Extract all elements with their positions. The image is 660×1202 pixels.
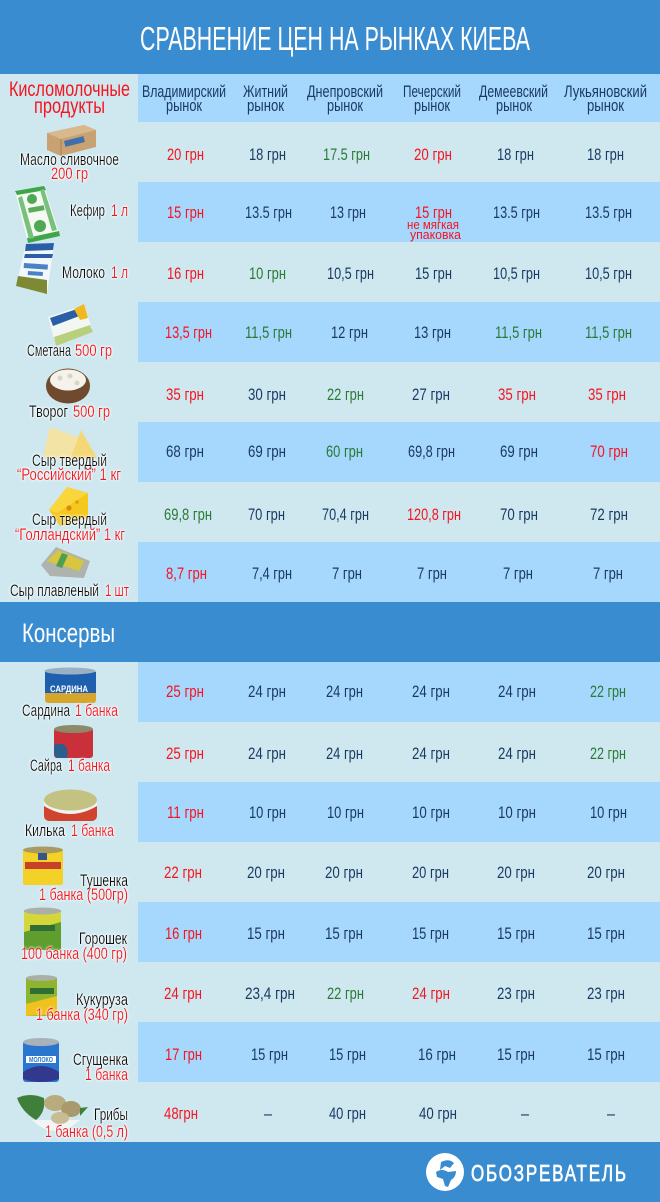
prices: 11,5 грн bbox=[495, 323, 542, 342]
prices: 20 грн bbox=[325, 863, 363, 882]
prices: 15 грн bbox=[251, 1045, 288, 1064]
prices: 18 грн bbox=[249, 145, 286, 164]
prices: 15 грн bbox=[415, 264, 452, 283]
prices: 15 грн bbox=[587, 924, 625, 943]
section band: canned goods bbox=[0, 602, 660, 662]
icon: sprat can bbox=[44, 790, 97, 821]
prices bbox=[167, 803, 627, 822]
prices: 11,5 грн bbox=[245, 323, 292, 342]
prices: 20 грн bbox=[414, 145, 452, 164]
market names: рынок bbox=[166, 97, 203, 115]
label: 1 банка bbox=[68, 757, 111, 775]
label: Сардина bbox=[22, 702, 71, 720]
icon: stewed meat can bbox=[23, 846, 63, 885]
row: butter bbox=[20, 125, 624, 183]
prices: 24 грн bbox=[412, 682, 450, 701]
prices: 10 грн bbox=[249, 264, 286, 283]
row: milk bbox=[16, 243, 632, 294]
label: “Голландский” 1 кг bbox=[15, 526, 125, 544]
label bbox=[20, 151, 119, 183]
market names: Днепровский bbox=[307, 83, 383, 101]
label bbox=[22, 702, 119, 720]
prices bbox=[165, 1045, 625, 1064]
label: 500 гр bbox=[73, 403, 110, 421]
prices: 22 грн bbox=[164, 863, 202, 882]
row: processed cheese bbox=[10, 542, 660, 602]
prices: 7 грн bbox=[503, 564, 533, 583]
prices: 13.5 грн bbox=[245, 203, 292, 222]
prices: 70 грн bbox=[248, 505, 285, 524]
prices: 11,5 грн bbox=[585, 323, 632, 342]
prices: 18 грн bbox=[587, 145, 624, 164]
icon: cheese with holes bbox=[49, 487, 88, 526]
label: Грибы bbox=[94, 1106, 128, 1124]
prices: 7,4 грн bbox=[252, 564, 292, 583]
icon: sardine can: САРДИНА bbox=[50, 684, 88, 694]
prices bbox=[167, 203, 632, 222]
prices: 13.5 грн bbox=[493, 203, 540, 222]
prices: 10 грн bbox=[249, 803, 286, 822]
title band bbox=[0, 0, 660, 74]
prices: 20 грн bbox=[247, 863, 285, 882]
label bbox=[73, 1051, 129, 1084]
row: cottage cheese bbox=[29, 368, 626, 421]
prices: 24 грн bbox=[498, 744, 536, 763]
market names: рынок bbox=[496, 97, 533, 115]
prices: – bbox=[264, 1104, 272, 1123]
prices: – bbox=[521, 1104, 529, 1123]
icon: bowl of cottage cheese bbox=[46, 368, 90, 404]
row: kefir bbox=[15, 182, 660, 243]
row: sprat bbox=[25, 782, 660, 842]
prices: 12 грн bbox=[331, 323, 368, 342]
prices: 15 грн bbox=[325, 924, 363, 943]
prices: 25 грн bbox=[166, 682, 204, 701]
prices bbox=[164, 863, 625, 882]
prices: 25 грн bbox=[166, 744, 204, 763]
prices bbox=[166, 744, 626, 763]
market names: Печерский bbox=[403, 83, 461, 101]
row: saury bbox=[30, 725, 626, 775]
prices: 10 грн bbox=[327, 803, 364, 822]
prices: 7 грн bbox=[417, 564, 447, 583]
prices: 22 грн bbox=[590, 744, 626, 763]
prices: 24 грн bbox=[412, 744, 450, 763]
row: green peas bbox=[21, 902, 660, 963]
prices: 22 грн bbox=[327, 984, 364, 1003]
prices: 15 грн bbox=[587, 1045, 625, 1064]
row: dutch hard cheese bbox=[15, 487, 628, 544]
prices bbox=[164, 984, 625, 1003]
prices: 40 грн bbox=[329, 1104, 366, 1123]
label: “Российский” 1 кг bbox=[17, 466, 121, 484]
section heading: Консервы bbox=[22, 618, 115, 648]
row: russian hard cheese bbox=[17, 422, 660, 484]
label: 200 гр bbox=[51, 165, 88, 183]
market names bbox=[142, 83, 647, 115]
prices: 7 грн bbox=[593, 564, 623, 583]
prices: 20 грн bbox=[497, 863, 535, 882]
prices: 15 грн bbox=[497, 924, 535, 943]
prices: 10 грн bbox=[412, 803, 450, 822]
label bbox=[39, 872, 129, 904]
label: Килька bbox=[25, 822, 66, 840]
label: Творог bbox=[29, 403, 68, 421]
prices: 11 грн bbox=[167, 803, 204, 822]
market names: Житний bbox=[243, 83, 288, 101]
footer band bbox=[0, 1142, 660, 1202]
note: not soft packaging: не мягкая bbox=[407, 217, 459, 232]
row: corn bbox=[26, 975, 625, 1024]
prices: 48грн bbox=[164, 1104, 198, 1123]
category heading: dairy: Кисломолочные bbox=[9, 78, 130, 101]
prices: 22 грн bbox=[590, 682, 626, 701]
row: sardine bbox=[22, 662, 660, 722]
prices: 13.5 грн bbox=[585, 203, 632, 222]
prices: 10,5 грн bbox=[493, 264, 540, 283]
market names: рынок bbox=[247, 97, 285, 115]
prices: 15 грн bbox=[415, 203, 452, 222]
icon: green peas can bbox=[24, 908, 61, 950]
prices: 15 грн bbox=[329, 1045, 366, 1064]
icon: sour cream pack bbox=[48, 304, 93, 346]
prices: 69,8 грн bbox=[408, 442, 455, 461]
prices: 17.5 грн bbox=[323, 145, 370, 164]
icon: processed cheese pack bbox=[41, 547, 90, 578]
category heading: dairy bbox=[9, 78, 130, 118]
label: Масло сливочное bbox=[20, 151, 119, 169]
label bbox=[45, 1106, 128, 1141]
icon: globe logo bbox=[426, 1153, 464, 1191]
note: not soft packaging: упаковка bbox=[410, 227, 462, 242]
row: stewed meat bbox=[23, 846, 625, 904]
prices: 10 грн bbox=[590, 803, 627, 822]
label: 1 банка (340 гр) bbox=[36, 1006, 128, 1024]
prices: 70 грн bbox=[500, 505, 538, 524]
prices: 24 грн bbox=[164, 984, 202, 1003]
label: Сыр твердый bbox=[32, 452, 107, 470]
market names: рынок bbox=[327, 97, 364, 115]
prices: 70,4 грн bbox=[322, 505, 369, 524]
prices: 17 грн bbox=[165, 1045, 202, 1064]
market names: рынок bbox=[587, 97, 625, 115]
icon: condensed milk can: МОЛОКО bbox=[29, 1057, 53, 1064]
prices: 27 грн bbox=[412, 385, 450, 404]
prices: 23 грн bbox=[497, 984, 535, 1003]
prices: 35 грн bbox=[498, 385, 536, 404]
row: condensed milk bbox=[23, 1022, 660, 1084]
prices: 35 грн bbox=[166, 385, 204, 404]
table header row bbox=[9, 74, 660, 122]
icon: butter box bbox=[47, 125, 96, 156]
prices bbox=[167, 145, 624, 164]
prices: 8,7 грн bbox=[166, 564, 207, 583]
label: 500 гр bbox=[75, 342, 112, 360]
prices: 13,5 грн bbox=[165, 323, 212, 342]
prices: 69 грн bbox=[500, 442, 538, 461]
label bbox=[36, 991, 129, 1024]
prices: 23 грн bbox=[587, 984, 625, 1003]
label: 1 банка bbox=[71, 822, 115, 840]
prices: 24 грн bbox=[326, 744, 363, 763]
prices: 30 грн bbox=[248, 385, 286, 404]
prices: 16 грн bbox=[167, 264, 204, 283]
prices: 7 грн bbox=[332, 564, 362, 583]
prices bbox=[165, 924, 625, 943]
prices: 15 грн bbox=[247, 924, 285, 943]
label bbox=[30, 757, 111, 775]
prices: 15 грн bbox=[497, 1045, 535, 1064]
prices: 20 грн bbox=[412, 863, 449, 882]
icon: milk pack bbox=[16, 243, 54, 294]
label: Сыр плавленый bbox=[10, 582, 99, 600]
prices bbox=[167, 264, 632, 283]
prices: 23,4 грн bbox=[245, 984, 295, 1003]
label: Молоко bbox=[62, 264, 105, 282]
label: 1 банка (500гр) bbox=[39, 886, 128, 904]
label: Сметана bbox=[27, 342, 72, 360]
prices: 69,8 грн bbox=[164, 505, 212, 524]
row: mushrooms bbox=[17, 1095, 615, 1141]
prices: 69 грн bbox=[248, 442, 286, 461]
icon: saury can bbox=[54, 725, 93, 758]
prices bbox=[165, 323, 632, 342]
prices: 16 грн bbox=[418, 1045, 456, 1064]
label: Сайра bbox=[30, 757, 63, 775]
prices: 16 грн bbox=[165, 924, 202, 943]
label: 1 л bbox=[111, 202, 128, 220]
prices: 10,5 грн bbox=[327, 264, 374, 283]
label bbox=[17, 452, 121, 484]
prices: 120,8 грн bbox=[407, 505, 461, 524]
prices: 15 грн bbox=[167, 203, 204, 222]
category heading: dairy: продукты bbox=[34, 95, 105, 118]
prices bbox=[164, 505, 628, 524]
prices bbox=[166, 682, 626, 701]
prices: 60 грн bbox=[326, 442, 363, 461]
prices bbox=[166, 564, 623, 583]
prices: 40 грн bbox=[419, 1104, 457, 1123]
prices: 13 грн bbox=[330, 203, 366, 222]
label: Кефир bbox=[70, 202, 105, 220]
icon: mushrooms in bowl bbox=[17, 1095, 88, 1131]
label: 100 банка (400 гр) bbox=[21, 945, 127, 963]
market names: Владимирский bbox=[142, 83, 226, 101]
market names: Демеевский bbox=[479, 83, 548, 101]
label: Горошек bbox=[79, 930, 128, 948]
icon: sardine can bbox=[44, 668, 96, 703]
logo wordmark: ОБОЗРЕВАТЕЛЬ bbox=[471, 1162, 626, 1187]
prices: 20 грн bbox=[587, 863, 625, 882]
prices bbox=[166, 385, 626, 404]
label: 1 л bbox=[111, 264, 128, 282]
label bbox=[15, 511, 125, 544]
prices: 13 грн bbox=[414, 323, 451, 342]
prices: 24 грн bbox=[248, 744, 286, 763]
prices: 68 грн bbox=[166, 442, 204, 461]
label: Сгущенка bbox=[73, 1051, 129, 1069]
label bbox=[21, 930, 128, 963]
row: sour cream bbox=[27, 302, 660, 362]
prices: 72 грн bbox=[590, 505, 628, 524]
prices: 10,5 грн bbox=[585, 264, 632, 283]
prices: 24 грн bbox=[498, 682, 536, 701]
market names: рынок bbox=[414, 97, 451, 115]
icon: kefir pack bbox=[15, 186, 60, 243]
label bbox=[25, 822, 115, 840]
label: 1 банка bbox=[75, 702, 119, 720]
label: 1 банка (0,5 л) bbox=[45, 1123, 128, 1141]
prices: 24 грн bbox=[326, 682, 363, 701]
label: Сыр твердый bbox=[32, 511, 107, 529]
icon: cheese wedge bbox=[43, 427, 97, 460]
prices: 18 грн bbox=[497, 145, 534, 164]
prices: 70 грн bbox=[590, 442, 628, 461]
prices bbox=[166, 442, 628, 461]
icon: corn can bbox=[26, 975, 57, 1016]
label: 1 шт bbox=[105, 582, 129, 600]
note: not soft packaging bbox=[407, 217, 462, 242]
icon: condensed milk can bbox=[23, 1038, 59, 1082]
prices: 24 грн bbox=[248, 682, 286, 701]
prices: 22 грн bbox=[327, 385, 364, 404]
prices: 35 грн bbox=[588, 385, 626, 404]
prices: 24 грн bbox=[412, 984, 450, 1003]
prices bbox=[164, 1104, 615, 1123]
label: Кукуруза bbox=[76, 991, 129, 1009]
label: 1 банка bbox=[85, 1066, 129, 1084]
label: Тушенка bbox=[80, 872, 129, 890]
label bbox=[29, 403, 110, 421]
prices: 15 грн bbox=[412, 924, 449, 943]
prices: 10 грн bbox=[498, 803, 536, 822]
prices: 20 грн bbox=[167, 145, 204, 164]
prices: – bbox=[607, 1104, 615, 1123]
